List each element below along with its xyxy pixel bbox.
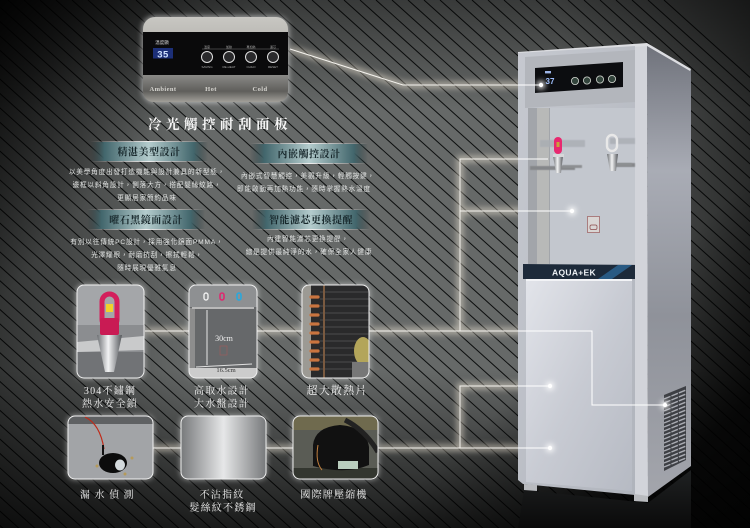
dispenser side panel [518,43,691,497]
dispenser front frame [518,46,635,495]
drip tray band with logo [523,264,635,279]
dispenser recess [528,108,635,264]
feature: embedded touch [237,143,375,193]
banner: 內嵌觸控設計 [278,148,340,160]
button labels: RESET [268,65,278,69]
photo: leak detector [67,415,154,480]
description: 以美學角度出發打造機能與設計兼具的新型態， [69,167,225,176]
photo: tall water outlet: 16.5cm [216,367,236,374]
lower door [526,279,632,491]
description [246,234,372,256]
warning sticker [588,216,600,232]
photo: tall water outlet: 30cm [215,334,234,343]
captions: 熱水安全鎖 [82,397,138,410]
description: 邊框以斜角設計，側落大方，搭配髮絲紋路， [73,180,221,189]
water temperature labels: Ambient [150,86,177,93]
description [69,167,225,202]
photo: safety lock faucet [76,284,145,379]
photo: tall water outlet [188,284,258,379]
feature: obsidian mirror [70,209,224,272]
button labels: CHILD [246,65,256,69]
description: 隨時展現優雅氣息 [117,263,177,272]
dispenser floor reflection [518,470,691,528]
button labels: SAVING [201,65,213,69]
description: 光澤耀眼，耐磨抗刮，擦拭輕鬆， [91,250,203,259]
captions: 不沾指紋 [200,488,244,501]
captions: 國際牌壓縮機 [300,488,368,501]
description: 總是提供最純淨的水，確保全家人健康 [246,247,372,256]
button labels: 濾芯 [270,44,276,49]
captions: 高取水設計 [194,384,250,397]
description: 內嵌式智慧觸控，美觀升級，輕觸按鍵， [241,171,375,180]
captions: 超大散熱片 [306,383,368,397]
temperature display: 溫度顯 [155,39,169,46]
button labels [201,44,278,69]
feature: refined design [69,141,225,202]
description: 內建智能濾芯更換提醒， [267,234,349,243]
photo: heat sink coil [301,284,372,379]
water dispenser [518,43,691,528]
temperature display [153,39,173,60]
side vents [664,386,686,471]
button labels: 再加熱 [246,44,256,49]
photo: brushed stainless steel [180,415,267,480]
connector lines [145,49,665,448]
control panel close-up [142,16,289,103]
touch buttons [202,49,279,62]
water temperature labels: Cold [253,86,267,93]
captions: 髮絲紋不銹鋼 [189,501,257,514]
inner connector lines over dispenser [518,85,665,448]
water temperature labels: Hot [205,86,217,93]
feature: smart filter reminder [246,209,372,256]
banner: 曜石黑鏡面設計 [109,214,183,226]
photo: compressor [292,415,379,480]
warm water faucet [607,135,632,171]
description: 即能啟動再加熱功能，隨時掌握熱水溫度 [237,184,371,193]
description: 更顯居家簡約品味 [117,193,177,202]
main title: 冷光觸控耐刮面板 [148,116,292,132]
button labels: 溫度 [204,44,210,49]
captions: 漏水偵測 [80,488,138,501]
button labels: RE-HEAT [223,65,236,69]
dispenser black control panel [535,62,623,93]
banner: 智能濾芯更換提醒 [269,214,353,226]
banner: 精湛美型設計 [118,146,180,158]
hot water faucet [553,137,582,173]
banner [90,141,208,162]
description [70,237,224,272]
description: 有別以往傳統PC設計，採用強化鏡面PMMA， [70,237,224,246]
glowing hotspots [537,81,669,452]
dispenser head panel [525,50,635,108]
banner [87,209,205,230]
description [237,171,375,193]
captions: 大水盤設計 [194,397,250,410]
drip tray band with logo: AQUA+EK [552,268,597,278]
temperature display: 35 [157,50,169,60]
dispenser feet [524,484,648,502]
captions: 304不鏽鋼 [84,384,136,397]
captions [80,383,368,514]
button labels: 加熱 [226,44,232,49]
water temperature labels [150,86,267,93]
dispenser black control panel: 37 [546,77,555,86]
